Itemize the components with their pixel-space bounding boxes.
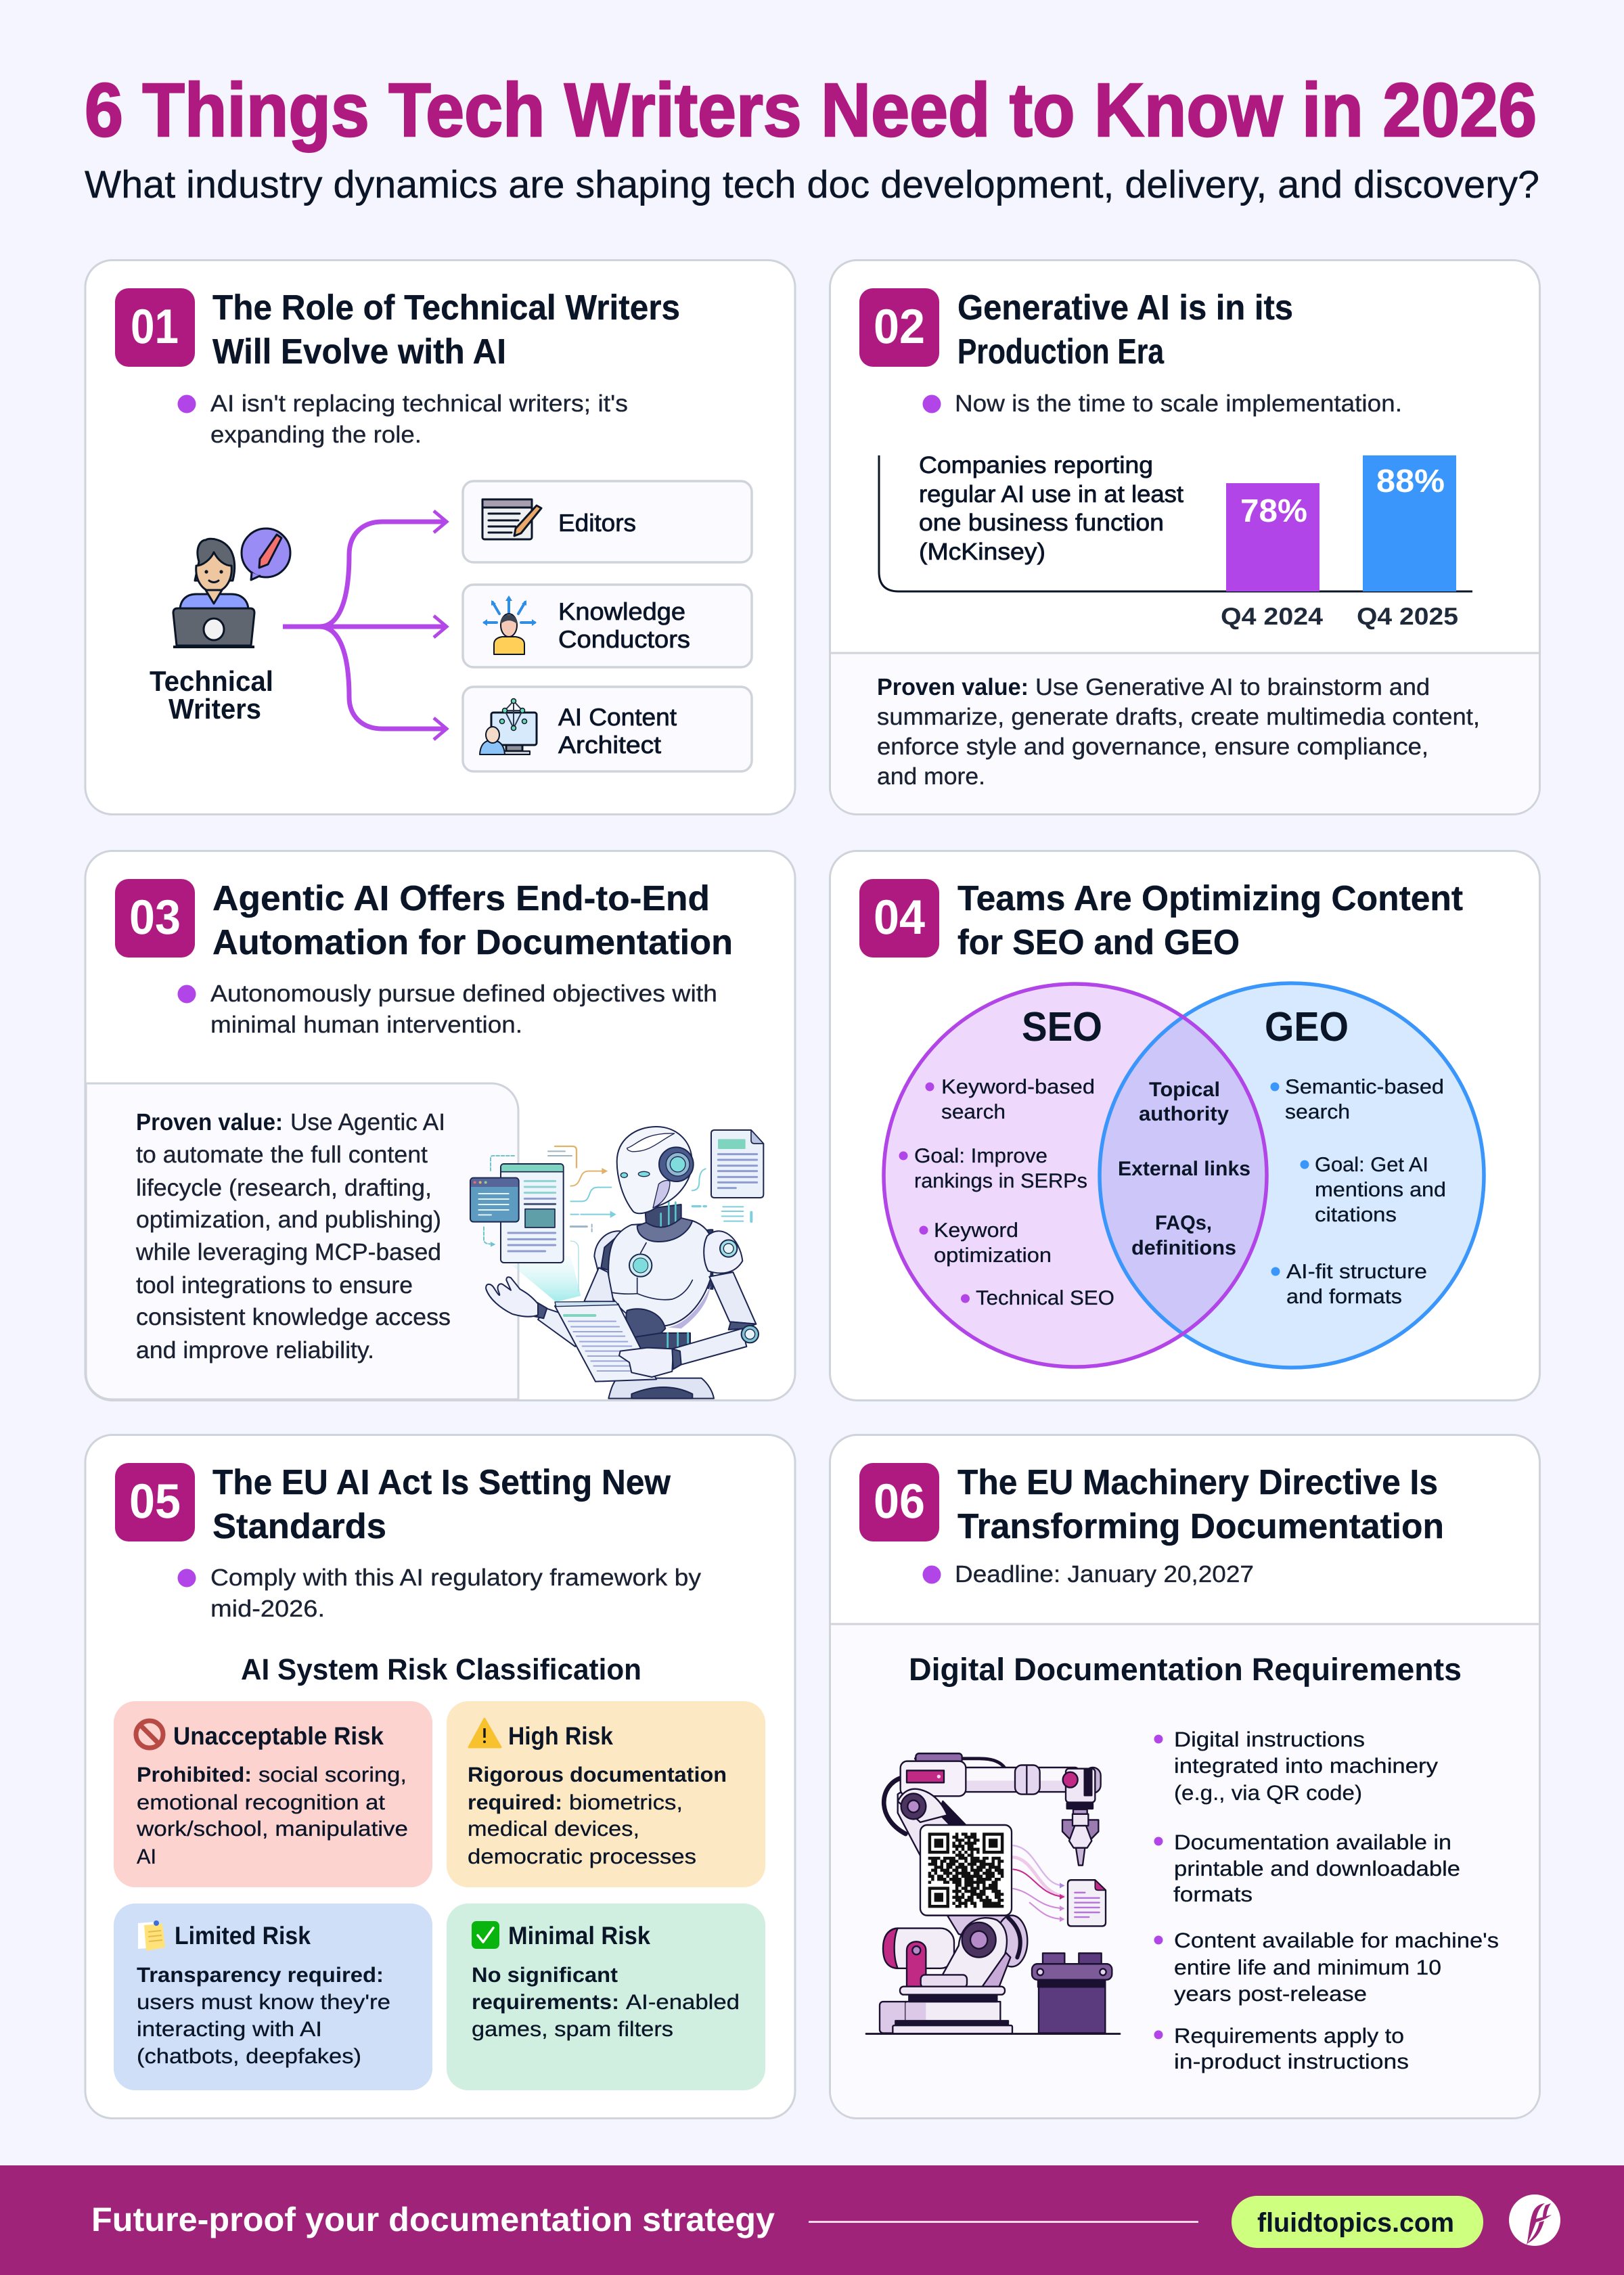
SEO column: Keyword	[934, 1219, 1018, 1242]
GEO column: Goal: Get AI	[1315, 1154, 1428, 1176]
proven value text 02	[877, 674, 1480, 790]
label: Technical Writers: Writers	[168, 693, 261, 725]
box: Knowledge Conductors: Knowledge	[558, 598, 685, 625]
card: minimal risk	[447, 1904, 765, 2090]
overlap column: definitions	[1131, 1237, 1236, 1259]
GEO column: search	[1285, 1101, 1350, 1123]
box: AI Content Architect: Architect	[558, 731, 661, 759]
logo	[1509, 2194, 1560, 2246]
panel: 01 role of technical writers	[85, 260, 795, 815]
footer text: Future-proof your documentation strategy	[91, 2201, 775, 2238]
bullet 05: mid-2026.	[210, 1596, 325, 1622]
card: unacceptable risk: work/school, manipulative	[136, 1817, 408, 1841]
box: AI Content Architect: AI Content	[558, 703, 677, 731]
heading 01: Will Evolve with AI	[212, 332, 506, 371]
card: unacceptable risk: social scoring,	[258, 1763, 407, 1786]
overlap column: authority	[1139, 1103, 1229, 1125]
SEO column: Goal: Improve	[914, 1145, 1047, 1167]
GEO column: citations	[1315, 1204, 1397, 1226]
badge 03	[115, 879, 195, 958]
heading 02	[957, 288, 1293, 371]
proven value text 02: Use Generative AI to brainstorm and	[1035, 674, 1430, 700]
bullet 01	[177, 390, 628, 448]
badge 02: 02	[874, 300, 925, 354]
badge 05: 05	[129, 1474, 181, 1529]
GEO column: mentions and	[1315, 1179, 1446, 1201]
SEO column: rankings in SERPs	[914, 1170, 1087, 1192]
heading 05: The EU AI Act Is Setting New	[212, 1463, 671, 1502]
badge 04	[859, 879, 939, 958]
subtitle: What industry dynamics are shaping tech doc development, delivery, and discovery?	[85, 163, 1539, 206]
card: unacceptable risk: emotional recognition at	[137, 1790, 385, 1814]
proven value text 03: consistent knowledge access	[136, 1304, 451, 1330]
overlap column: External links	[1118, 1158, 1250, 1180]
requirements list: years post-release	[1174, 1982, 1367, 2006]
heading 04	[957, 879, 1463, 962]
heading 02: Generative AI is in its	[957, 288, 1293, 328]
badge 03: 03	[129, 891, 181, 945]
bullet 06: Deadline: January 20,2027	[955, 1561, 1254, 1587]
box: Editors	[463, 481, 752, 562]
label: Technical Writers: Technical	[150, 665, 273, 697]
badge 06	[859, 1463, 939, 1541]
panel: 02 generative AI	[830, 260, 1540, 815]
icon: prohibited	[136, 1721, 163, 1748]
card: high risk: democratic processes	[468, 1845, 696, 1868]
SEO column: SEO	[1022, 1004, 1102, 1050]
icon: check	[472, 1921, 499, 1949]
card: limited risk: Transparency required:	[137, 1963, 384, 1987]
box: Knowledge Conductors: Conductors	[558, 625, 690, 653]
badge 01: 01	[131, 300, 179, 354]
url pill	[1232, 2196, 1483, 2248]
requirements list: (e.g., via QR code)	[1174, 1781, 1362, 1805]
robot body	[486, 1127, 759, 1399]
heading 03	[212, 879, 733, 962]
small window	[470, 1178, 519, 1222]
proven value text 02: enforce style and governance, ensure compliance,	[877, 734, 1428, 760]
proven value text 03: and improve reliability.	[136, 1337, 374, 1364]
icon: technical writer at laptop	[173, 528, 290, 648]
icon: editor window and pencil	[482, 499, 541, 539]
bullet 02: Now is the time to scale implementation.	[955, 390, 1402, 417]
proven value text 03: tool integrations to ensure	[136, 1272, 413, 1299]
heading 06: Transforming Documentation	[957, 1507, 1444, 1546]
card: minimal risk: Minimal Risk	[508, 1922, 650, 1950]
requirements list: formats	[1173, 1883, 1253, 1906]
heading 05	[212, 1463, 671, 1546]
venn diagram	[884, 983, 1484, 1368]
heading 01	[212, 288, 680, 371]
proven value text 02: Proven value:	[877, 674, 1029, 700]
card: limited risk: (chatbots, deepfakes)	[137, 2044, 361, 2068]
card: unacceptable risk: AI	[137, 1845, 156, 1868]
card: high risk: Rigorous documentation	[468, 1763, 727, 1786]
bar: Q4 2024 78%: Q4 2024	[1221, 602, 1323, 630]
SEO column: optimization	[934, 1244, 1052, 1267]
SEO column: Keyword-based	[941, 1076, 1095, 1098]
arrows: branching connector	[283, 511, 447, 740]
panel: 04 SEO and GEO	[830, 851, 1540, 1401]
requirements list: Digital instructions	[1174, 1728, 1365, 1751]
bar: Q4 2024 78%	[1221, 483, 1323, 630]
subheading: risk classification: AI System Risk Classification	[241, 1653, 641, 1686]
card: minimal risk: games, spam filters	[472, 2017, 673, 2041]
panel: 03 agentic AI	[85, 851, 795, 1401]
subheading: digital documentation: Digital Documentation Requirements	[909, 1651, 1462, 1687]
requirements list: Requirements apply to	[1174, 2024, 1404, 2048]
illustration: robot arm with QR code	[866, 1753, 1120, 2034]
GEO column: Semantic-based	[1285, 1076, 1444, 1098]
heading 01: The Role of Technical Writers	[212, 288, 680, 328]
url pill: fluidtopics.com	[1257, 2208, 1454, 2238]
overlap column: FAQs,	[1155, 1212, 1212, 1234]
card: limited risk: interacting with AI	[137, 2017, 322, 2041]
big document window	[501, 1164, 564, 1263]
card: unacceptable risk	[114, 1701, 432, 1887]
bullet 01: expanding the role.	[210, 422, 422, 448]
requirements list: entire life and minimum 10	[1174, 1956, 1441, 1979]
card: minimal risk: AI-enabled	[626, 1990, 740, 2014]
bullet 05	[177, 1564, 702, 1622]
chart caption: Companies reporting	[919, 452, 1153, 478]
chart caption: one business function	[919, 510, 1164, 536]
proven value text 03	[135, 1109, 451, 1364]
box: Editors: Editors	[558, 509, 636, 537]
badge 01	[115, 288, 195, 367]
badge 02	[859, 288, 939, 367]
bar: Q4 2024 78%: 78%	[1240, 493, 1307, 529]
proven value text 03: Use Agentic AI	[290, 1109, 445, 1135]
badge 05	[115, 1463, 195, 1541]
chart caption	[919, 452, 1183, 565]
card: high risk: medical devices,	[468, 1817, 639, 1841]
card: limited risk	[114, 1904, 432, 2090]
right document	[711, 1130, 763, 1198]
heading 03: Automation for Documentation	[212, 923, 733, 962]
chart caption: (McKinsey)	[919, 539, 1045, 565]
requirements list: Content available for machine's	[1174, 1929, 1499, 1952]
bullet 03: minimal human intervention.	[210, 1012, 522, 1038]
card: limited risk: users must know they're	[137, 1990, 390, 2014]
box: AI Content Architect	[463, 687, 752, 771]
bar: Q4 2025 88%: Q4 2025	[1357, 602, 1458, 630]
icon: conductor with arrows	[482, 595, 537, 654]
icon: note	[138, 1920, 165, 1951]
SEO column: Technical SEO	[976, 1287, 1114, 1309]
proven value text 03: Proven value:	[136, 1109, 283, 1135]
card: unacceptable risk: Prohibited:	[137, 1763, 252, 1786]
overlap column: Topical	[1149, 1079, 1220, 1101]
icon: warning	[469, 1719, 501, 1747]
proven value box 03	[86, 1083, 518, 1399]
label: Technical Writers	[150, 665, 273, 725]
card: minimal risk: requirements:	[472, 1990, 619, 2014]
requirements list: printable and downloadable	[1174, 1857, 1460, 1880]
GEO column: GEO	[1265, 1004, 1349, 1050]
proven value text 03: optimization, and publishing)	[136, 1207, 441, 1233]
bar: Q4 2025 88%: 88%	[1376, 464, 1445, 499]
box: Knowledge Conductors	[463, 585, 752, 667]
footer band	[0, 2165, 1624, 2275]
chart caption: regular AI use in at least	[919, 481, 1183, 508]
bullet 03	[177, 981, 717, 1038]
heading 05: Standards	[212, 1507, 386, 1546]
card: minimal risk: No significant	[472, 1963, 618, 1987]
illustration: robot with documents	[470, 1127, 763, 1399]
proven value text 02: and more.	[877, 763, 985, 790]
heading 06: The EU Machinery Directive Is	[957, 1463, 1438, 1502]
icon: architect with monitor	[480, 698, 537, 754]
panel: 05 EU AI Act	[85, 1435, 795, 2118]
GEO column	[1265, 1004, 1446, 1308]
proven value text 02: summarize, generate drafts, create multimedia content,	[877, 704, 1480, 730]
proven value text 03: lifecycle (research, drafting,	[136, 1175, 432, 1201]
heading 04: Teams Are Optimizing Content	[957, 879, 1463, 918]
bar chart	[879, 452, 1472, 630]
badge 06: 06	[874, 1474, 925, 1529]
heading 06	[957, 1463, 1444, 1546]
bullet 05: Comply with this AI regulatory framework by	[210, 1564, 702, 1591]
card: unacceptable risk: Unacceptable Risk	[173, 1722, 384, 1750]
GEO column: AI-fit structure	[1286, 1261, 1427, 1283]
proven value text 03: to automate the full content	[136, 1142, 428, 1168]
requirements list: integrated into machinery	[1174, 1754, 1439, 1778]
document and flow	[1013, 1845, 1064, 1922]
card: limited risk: Limited Risk	[175, 1922, 311, 1950]
GEO column: and formats	[1286, 1286, 1402, 1308]
card: high risk: High Risk	[508, 1722, 613, 1750]
bullet 01: AI isn't replacing technical writers; it's	[210, 390, 628, 417]
heading 04: for SEO and GEO	[957, 923, 1240, 962]
heading 03: Agentic AI Offers End-to-End	[212, 879, 710, 918]
requirements list	[1154, 1728, 1499, 2073]
overlap column	[1118, 1079, 1250, 1259]
badge 04: 04	[874, 891, 925, 945]
proven value text 03: while leveraging MCP-based	[135, 1239, 441, 1265]
SEO column	[899, 1004, 1114, 1309]
card: high risk	[447, 1701, 765, 1887]
card: high risk: required:	[468, 1790, 562, 1814]
requirements list: Documentation available in	[1174, 1830, 1451, 1854]
bullet 03: Autonomously pursue defined objectives with	[210, 981, 717, 1007]
panel: 06 EU machinery directive	[830, 1435, 1540, 2118]
card: high risk: biometrics,	[569, 1790, 683, 1814]
bar: Q4 2025 88%	[1357, 455, 1458, 630]
requirements list: in-product instructions	[1174, 2050, 1409, 2073]
QR code	[920, 1825, 1012, 1916]
SEO column: search	[941, 1101, 1006, 1123]
heading 02: Production Era	[957, 332, 1165, 371]
